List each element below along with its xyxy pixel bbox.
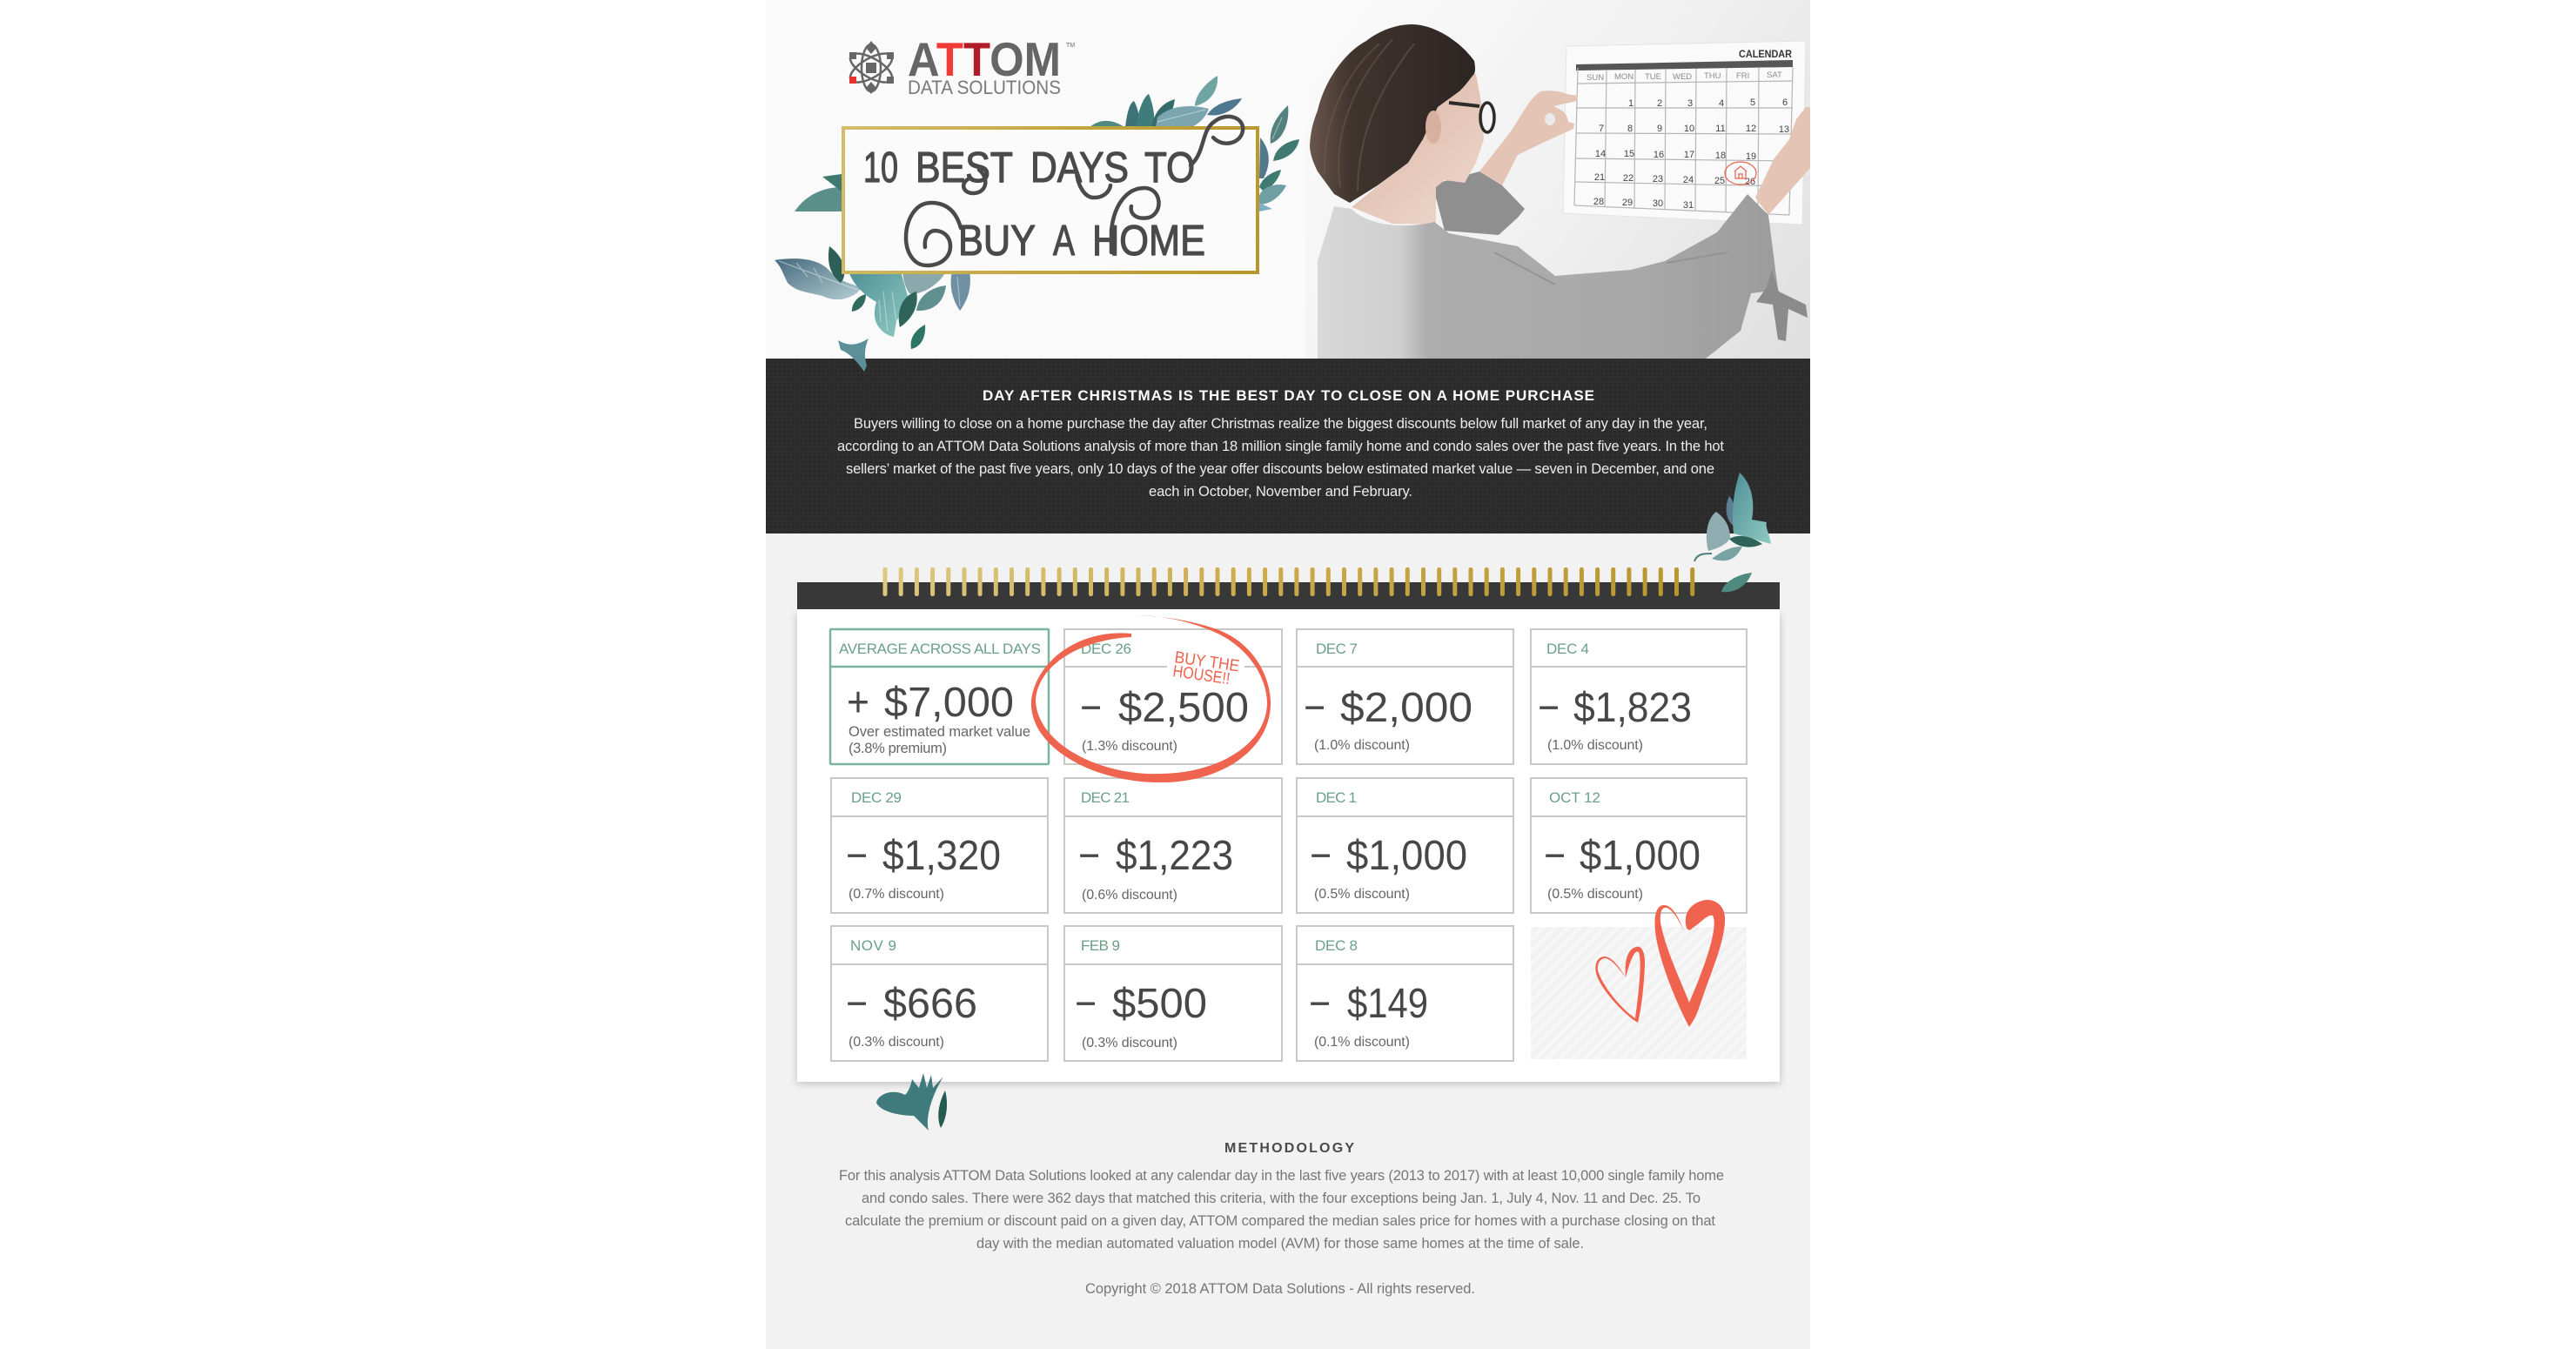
methodology body <box>839 1168 1724 1252</box>
card: dec 26 <box>1064 629 1282 764</box>
card: dec 4: − <box>1538 685 1560 731</box>
calendar: 4 <box>1719 98 1724 109</box>
calendar: 16 <box>1654 150 1664 160</box>
calendar: 13 <box>1779 124 1789 135</box>
calendar: 23 <box>1653 174 1663 185</box>
card: feb 9 <box>1064 926 1282 1061</box>
title line 1: 10 <box>863 144 898 191</box>
leaves: behind the title box <box>775 76 1299 349</box>
calendar: 8 <box>1627 124 1633 134</box>
card: oct 12: − <box>1544 833 1566 879</box>
hearts panel <box>1531 900 1747 1059</box>
card: dec 26: DEC 26 <box>1081 641 1131 657</box>
card: oct 12: $1,000 <box>1580 833 1701 879</box>
card: feb 9: − <box>1075 981 1097 1027</box>
card: average across all days: $7,000 <box>884 680 1014 726</box>
calendar: 2 <box>1657 98 1662 109</box>
calendar: 22 <box>1623 173 1633 184</box>
gap between fingers <box>1545 113 1555 125</box>
card: dec 29: $1,320 <box>882 833 1001 879</box>
wordmark: ATTOM <box>908 32 1061 86</box>
card: oct 12 <box>1531 778 1747 913</box>
calendar: 31 <box>1683 200 1694 211</box>
calendar: 19 <box>1746 151 1756 162</box>
card: average across all days <box>830 629 1049 764</box>
calendar: 21 <box>1594 172 1605 183</box>
calendar: WED <box>1673 72 1692 82</box>
title swirls <box>906 117 1243 265</box>
title line 1: BEST <box>916 144 1013 191</box>
card: dec 1: − <box>1310 833 1332 879</box>
calendar: 29 <box>1622 198 1633 208</box>
card: dec 21 <box>1064 778 1282 913</box>
calendar: 17 <box>1684 150 1694 160</box>
card: dec 4 <box>1531 629 1747 764</box>
card: dec 1: $1,000 <box>1346 833 1467 879</box>
hair strands <box>1325 39 1414 191</box>
card: dec 26: $2,500 <box>1118 685 1249 731</box>
methodology heading: METHODOLOGY <box>1224 1141 1354 1156</box>
calendar: 6 <box>1782 97 1788 108</box>
card: dec 8: − <box>1309 981 1331 1027</box>
sweater fold <box>1494 252 1727 285</box>
card: dec 29: DEC 29 <box>851 789 902 806</box>
title line 2: HOME <box>1092 218 1205 265</box>
card: dec 26: (1.3% discount) <box>1082 739 1177 754</box>
card: dec 1 <box>1297 778 1513 913</box>
sweater <box>1318 194 1778 359</box>
card header bar <box>797 582 1780 609</box>
intro heading: DAY AFTER CHRISTMAS IS THE BEST DAY TO CLOSE ON A HOME PURCHASE <box>983 387 1594 404</box>
neck and face <box>1352 74 1484 225</box>
card: nov 9: (0.3% discount) <box>849 1035 944 1050</box>
card: average across all days: Over estimated market value <box>849 724 1030 740</box>
calendar: 11 <box>1715 124 1726 134</box>
calendar: CALENDAR <box>1739 48 1792 60</box>
title line 1: DAYS <box>1030 144 1129 191</box>
card: dec 1: (0.5% discount) <box>1314 887 1410 902</box>
calendar: 14 <box>1595 149 1606 159</box>
calendar: 12 <box>1746 124 1756 134</box>
title line 1: TO <box>1144 144 1195 191</box>
card: dec 4: DEC 4 <box>1546 641 1589 657</box>
calendar: 30 <box>1653 198 1663 209</box>
far hand and forearm <box>1755 107 1810 215</box>
card: average across all days: (3.8% premium) <box>849 741 947 756</box>
card: dec 7: DEC 7 <box>1316 641 1358 657</box>
calendar: 3 <box>1687 98 1693 109</box>
spiral rings <box>882 567 1694 596</box>
calendar: 18 <box>1715 151 1726 161</box>
photo: woman hanging a calendar <box>1305 0 1810 359</box>
card: dec 29 <box>831 778 1048 913</box>
card: dec 8 <box>1297 926 1513 1061</box>
sleeve tie <box>1756 270 1808 341</box>
card: dec 8: (0.1% discount) <box>1314 1035 1410 1050</box>
card: average across all days: + <box>847 680 869 726</box>
calendar house mark <box>1725 162 1756 185</box>
intro body <box>837 416 1724 500</box>
intro body: according to an ATTOM Data Solutions analysis of more than 18 million single family home and condo sales over the past five years. In the hot <box>837 439 1724 454</box>
card: dec 21: $1,223 <box>1116 833 1233 879</box>
card: dec 4: $1,823 <box>1573 685 1692 731</box>
red brush circle around dec 26 <box>1031 615 1271 782</box>
calendar: FRI <box>1736 71 1749 81</box>
card: dec 8: $149 <box>1347 981 1428 1027</box>
intro body: each in October, November and February. <box>1149 484 1412 500</box>
page background <box>766 0 1810 1349</box>
card: nov 9: NOV 9 <box>850 937 896 954</box>
card: dec 29: (0.7% discount) <box>849 887 944 902</box>
calendar: 28 <box>1593 197 1604 207</box>
methodology body: and condo sales. There were 362 days that matched this criteria, with the four exceptions being Jan. 1, July 4, Nov. 11 and Dec. 25. To <box>862 1191 1701 1206</box>
card: average across all days: AVERAGE ACROSS ALL DAYS <box>839 641 1041 657</box>
card: feb 9: FEB 9 <box>1081 937 1120 954</box>
glasses <box>1449 103 1494 132</box>
card: dec 7 <box>1297 629 1513 764</box>
calendar: THU <box>1704 71 1721 81</box>
falling leaf over band <box>838 339 869 372</box>
calendar: SAT <box>1767 70 1782 80</box>
card: oct 12: (0.5% discount) <box>1547 887 1643 902</box>
calendar: 25 <box>1714 176 1725 186</box>
intro band <box>766 359 1810 534</box>
card: dec 4: (1.0% discount) <box>1547 738 1643 753</box>
leaves: below card <box>876 1073 947 1131</box>
card: feb 9: (0.3% discount) <box>1082 1036 1177 1050</box>
card: dec 21: (0.6% discount) <box>1082 888 1177 903</box>
icon: big heart <box>1654 900 1725 1027</box>
card: dec 7: $2,000 <box>1340 685 1472 731</box>
methodology <box>839 1141 1724 1297</box>
card: nov 9 <box>831 926 1048 1061</box>
calendar: 5 <box>1750 97 1755 108</box>
calendar: 9 <box>1657 124 1662 134</box>
methodology body: calculate the premium or discount paid on a given day, ATTOM compared the median sales price for homes with a purchase closing on that <box>845 1213 1715 1229</box>
calendar: 26 <box>1745 177 1755 187</box>
tagline: DATA SOLUTIONS <box>908 77 1061 98</box>
title line 2: A <box>1053 218 1075 265</box>
calendar: 24 <box>1683 175 1694 185</box>
callout: buy the house: BUY THE <box>1173 648 1240 675</box>
leaves: right of band <box>1694 473 1771 592</box>
ear <box>1426 111 1441 144</box>
icon: atom mark <box>846 41 896 94</box>
calendar: 15 <box>1624 149 1634 159</box>
methodology body: For this analysis ATTOM Data Solutions looked at any calendar day in the last five years (2013 to 2017) with at least 10,000 single family home <box>839 1168 1724 1184</box>
title line 2 <box>958 218 1205 265</box>
hair <box>1310 24 1475 203</box>
card: nov 9: $666 <box>883 981 977 1027</box>
title line 2: BUY <box>958 218 1036 265</box>
card: dec 26: − <box>1080 685 1102 731</box>
card: dec 8: DEC 8 <box>1315 937 1358 954</box>
card: dec 1: DEC 1 <box>1316 789 1357 806</box>
logo <box>846 32 1075 98</box>
title box <box>843 117 1258 272</box>
card: dec 29: − <box>846 833 868 879</box>
methodology body: day with the median automated valuation model (AVM) for those same homes at the time of sale. <box>976 1236 1584 1252</box>
card: nov 9: − <box>846 981 868 1027</box>
callout: buy the house: HOUSE!! <box>1171 662 1231 688</box>
card: dec 7: − <box>1304 685 1325 731</box>
title line 1 <box>863 144 1195 191</box>
calendar <box>1563 41 1806 225</box>
card: dec 7: (1.0% discount) <box>1314 738 1410 753</box>
calendar: 7 <box>1599 124 1604 134</box>
calendar card <box>797 567 1780 1084</box>
card: dec 21: DEC 21 <box>1081 789 1130 806</box>
callout: buy the house <box>1171 648 1240 688</box>
card: dec 21: − <box>1078 833 1100 879</box>
calendar: SUN <box>1587 73 1604 83</box>
card: feb 9: $500 <box>1112 981 1207 1027</box>
logo: TM <box>1066 43 1075 49</box>
near hand and forearm <box>1479 91 1578 185</box>
card: oct 12: OCT 12 <box>1549 789 1600 806</box>
calendar: 1 <box>1628 98 1633 109</box>
icon: small heart <box>1595 947 1645 1023</box>
far sleeve <box>1432 171 1525 235</box>
copyright: Copyright © 2018 ATTOM Data Solutions - All rights reserved. <box>1085 1281 1475 1297</box>
header panel <box>766 0 1810 359</box>
calendar: TUE <box>1645 72 1661 82</box>
intro body: sellers’ market of the past five years, only 10 days of the year offer discounts below estimated market value — seven in December, and one <box>846 461 1714 477</box>
intro body: Buyers willing to close on a home purchase the day after Christmas realize the biggest discounts below full market of any day in the year, <box>854 416 1707 432</box>
calendar: 10 <box>1684 124 1694 134</box>
calendar: MON <box>1614 72 1633 82</box>
